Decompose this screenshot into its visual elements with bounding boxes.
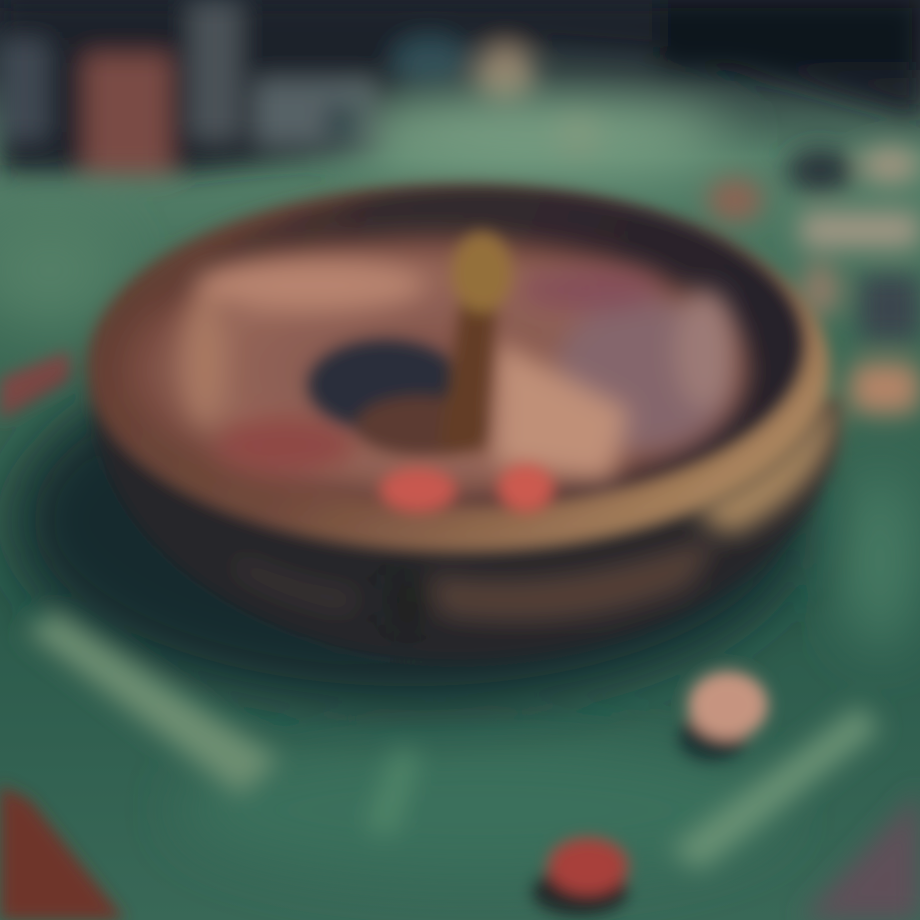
light wedge xyxy=(495,340,630,480)
bottom left wood edge xyxy=(0,785,125,920)
outer rim xyxy=(86,184,830,552)
roulette wheel xyxy=(86,184,840,660)
lower right stripes xyxy=(365,705,880,870)
chip red bottom xyxy=(532,838,628,916)
chip right xyxy=(678,671,768,762)
felt betting stripe xyxy=(25,612,280,795)
left table edge xyxy=(0,350,70,420)
right side chips and table edge xyxy=(707,147,920,414)
wheel base xyxy=(95,380,840,660)
bowl xyxy=(120,235,750,505)
pocket rings xyxy=(183,259,735,473)
wheel hub xyxy=(307,339,463,431)
wheel shadow xyxy=(15,335,805,705)
red pockets xyxy=(380,464,554,512)
top dark backdrop xyxy=(0,0,920,175)
center spindle xyxy=(440,232,512,450)
base slats xyxy=(230,535,720,625)
bottom right corner xyxy=(800,790,920,920)
rim lower highlight xyxy=(690,385,838,535)
rim dark inner edge xyxy=(152,187,804,503)
